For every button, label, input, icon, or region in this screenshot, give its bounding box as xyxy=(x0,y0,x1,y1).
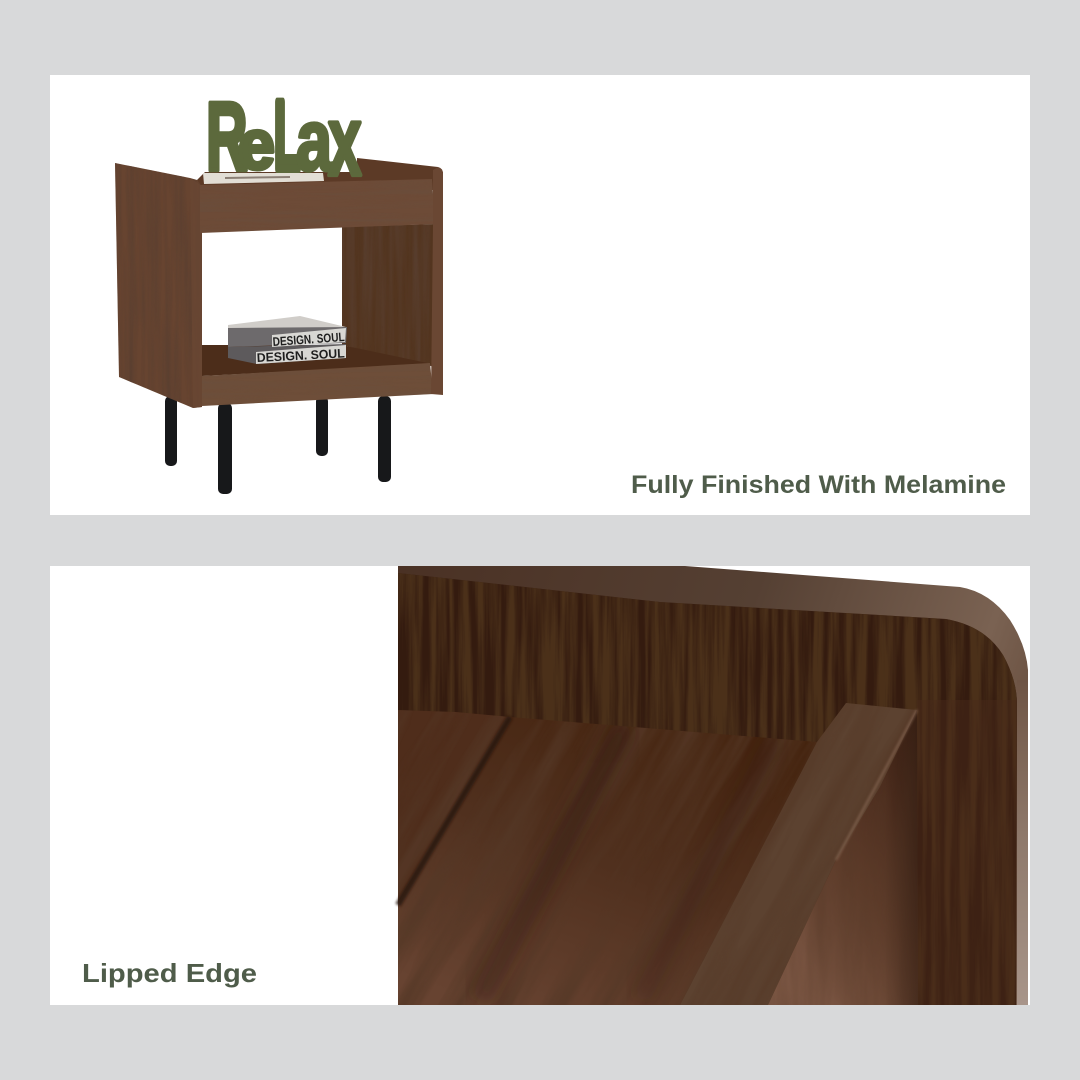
book on top shelf xyxy=(203,173,324,184)
top front band xyxy=(198,177,438,235)
back wall and side panel xyxy=(398,570,1020,1006)
infographic canvas xyxy=(50,75,1030,1005)
side panel xyxy=(115,163,202,408)
decor: Relax sign: x xyxy=(328,85,362,197)
product: bedside table with decor xyxy=(110,81,443,494)
lower shelf xyxy=(202,345,432,376)
panel: fully finished with melamine xyxy=(50,75,1030,515)
book title: lower: DESIGN. SOUL xyxy=(256,346,345,365)
decor: Relax sign: R xyxy=(206,82,248,192)
outer rim of side panel xyxy=(398,566,1028,1005)
inner right panel xyxy=(340,222,437,370)
book title: upper: DESIGN. SOUL xyxy=(272,330,345,349)
decor: Relax sign: a xyxy=(296,93,333,189)
caption: fully finished with melamine: Fully Finished With Melamine xyxy=(631,471,1006,499)
right lip inner face xyxy=(768,709,918,1005)
shelf floor xyxy=(398,718,816,1005)
bottom front band xyxy=(202,363,432,406)
right lip top face xyxy=(680,703,916,1005)
caption: lipped edge: Lipped Edge xyxy=(82,958,257,988)
decor: Relax sign xyxy=(206,81,362,197)
panel: lipped edge xyxy=(50,566,1079,1006)
close-up photo: lipped edge wood xyxy=(394,566,1028,1005)
back lip and table top xyxy=(197,158,443,190)
light panel edge xyxy=(1017,680,1028,1005)
right post xyxy=(431,167,443,395)
decor: Relax sign: L xyxy=(274,81,300,191)
icon: table legs xyxy=(165,396,391,494)
stacked books xyxy=(228,316,347,365)
left lip xyxy=(394,710,512,908)
decor: Relax sign: e xyxy=(238,105,275,184)
